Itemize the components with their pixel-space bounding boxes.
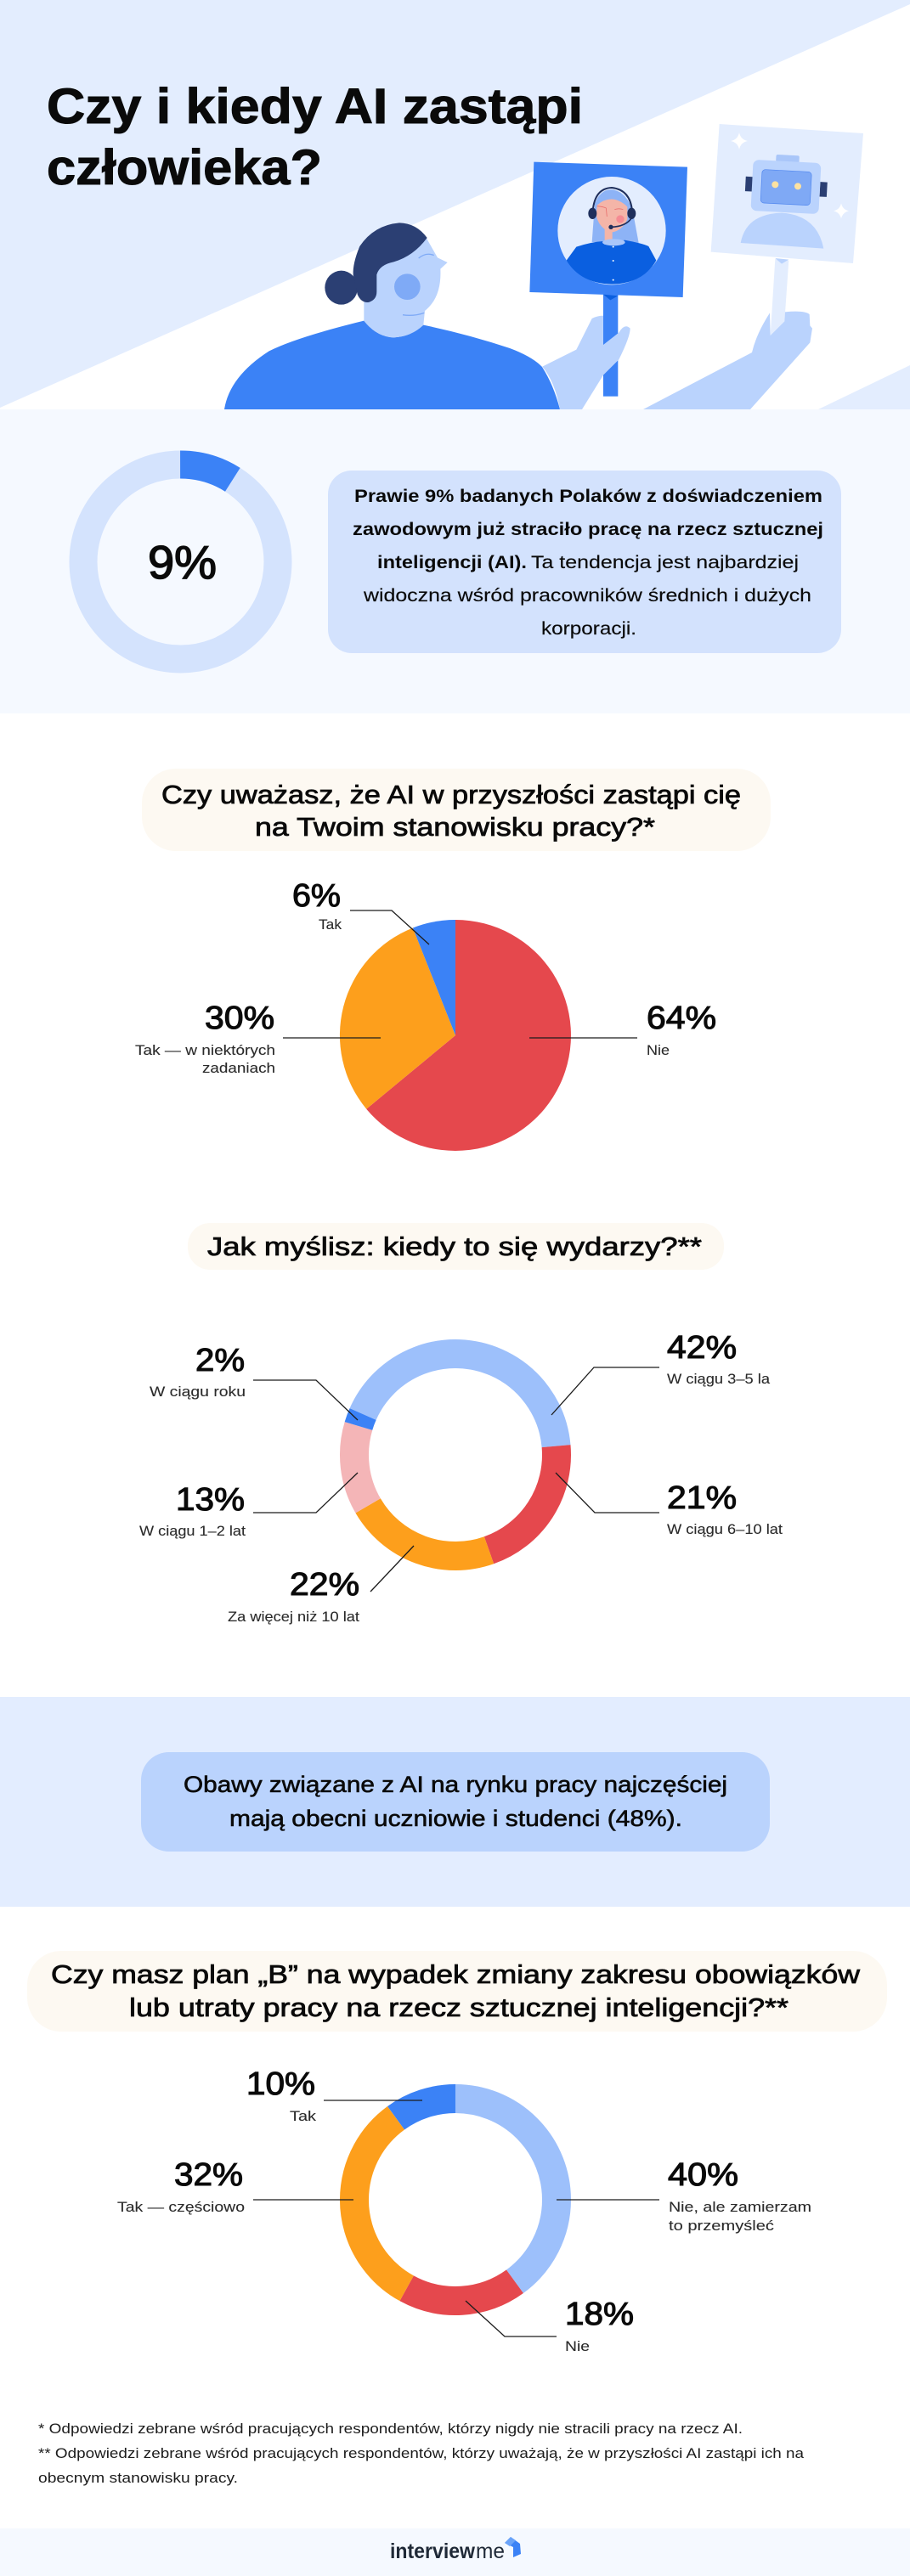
footnotes [38, 2421, 805, 2486]
label: 2%: 2% [195, 1343, 245, 1378]
label: 22%: Za więcej niż 10 lat [228, 1609, 359, 1625]
logo wordmark: me [476, 2539, 505, 2563]
icon: robot sign [711, 124, 863, 335]
label: 30% Tak w niektórych zadaniach: 30% [205, 1001, 274, 1036]
label: 22%: 22% [290, 1567, 359, 1603]
logo icon [505, 2537, 521, 2557]
label: 10%: Tak [290, 2108, 317, 2124]
footnotes: * Odpowiedzi zebrane wśród pracujących respondentów, którzy nigdy nie stracili pracy na rzecz AI. [38, 2421, 743, 2437]
label: 30% Tak w niektórych zadaniach: Tak — w niektórych [135, 1042, 275, 1058]
label: 64% Nie [647, 1001, 716, 1058]
icon: right arm and hand [643, 312, 812, 409]
donut chart: 9% [83, 465, 278, 659]
leader lines [253, 2100, 659, 2336]
panel: question 3 [27, 1951, 887, 2354]
label: 21% [667, 1480, 783, 1537]
label: 40%: to przemyśleć [669, 2218, 775, 2234]
icon: consultant sign [529, 162, 687, 397]
title: człowieka? [47, 140, 322, 195]
heading pill [188, 1223, 724, 1270]
leader lines [253, 1367, 659, 1592]
panel: question 2 [139, 1223, 783, 1625]
label: 6% Tak: 6% [292, 878, 341, 914]
label: 40%: Nie, ale zamierzam [669, 2199, 811, 2215]
label: 18%: Nie [565, 2338, 590, 2354]
callout card [328, 471, 841, 653]
callout card: Obawy związane z AI na rynku pracy najczęściej [184, 1772, 727, 1797]
label: 6% Tak [292, 878, 342, 933]
panel: students callout [0, 1697, 910, 1907]
callout card: zawodowym już straciło pracę na rzecz sztucznej [353, 520, 823, 539]
label: 18% [565, 2297, 634, 2354]
heading pill: Jak myślisz: kiedy to się wydarzy?** [207, 1232, 702, 1261]
label: 21%: 21% [667, 1480, 737, 1516]
label: 42% [667, 1330, 771, 1387]
label: 32%: 32% [174, 2157, 243, 2193]
label: 30% Tak w niektórych zadaniach [135, 1001, 275, 1076]
label: 21%: W ciągu 6–10 lat [667, 1521, 783, 1537]
panel: 9% statistic [0, 409, 910, 713]
panel: question 1 [135, 769, 771, 1151]
callout card: Prawie 9% badanych Polaków z doświadczeniem [354, 487, 822, 506]
label: 6% Tak: Tak [319, 916, 342, 933]
label: 32% [117, 2157, 245, 2215]
label: 40% [668, 2157, 811, 2234]
illustration: person seen from behind [224, 223, 560, 409]
label: 30% Tak w niektórych zadaniach: zadaniach [202, 1060, 275, 1076]
label: 2% [150, 1343, 246, 1400]
section background [0, 1697, 910, 1907]
label: 2%: W ciągu roku [150, 1384, 246, 1400]
callout card: korporacji. [541, 619, 636, 639]
heading pill [142, 769, 771, 851]
callout card: Ta tendencja jest najbardziej [531, 553, 799, 572]
label: 64% Nie: 64% [647, 1001, 716, 1036]
label: 10% [246, 2066, 317, 2124]
footer [0, 2528, 910, 2576]
donut value: 9% [148, 536, 217, 589]
title: Czy i kiedy AI zastąpi [47, 79, 583, 134]
leader lines [283, 910, 637, 1038]
label: 13% [139, 1482, 246, 1539]
heading pill [27, 1951, 887, 2032]
logo wordmark: interview [390, 2539, 476, 2563]
callout card [141, 1752, 770, 1852]
donut chart [314, 2059, 596, 2341]
label: 13%: W ciągu 1–2 lat [139, 1523, 246, 1539]
label: 42%: 42% [667, 1330, 737, 1366]
footnotes: ** Odpowiedzi zebrane wśród pracujących respondentów, którzy uważają, że w przyszłości AI zastąpi ich na [38, 2445, 805, 2461]
panel: hero header [0, 0, 910, 409]
label: 13%: 13% [176, 1482, 245, 1518]
heading pill: na Twoim stanowisku pracy?* [255, 812, 655, 842]
callout card: widoczna wśród pracowników średnich i dużych [363, 586, 811, 606]
label: 32%: Tak — częściowo [117, 2199, 245, 2215]
label: 18%: 18% [565, 2297, 634, 2332]
label: 64% Nie: Nie [647, 1042, 670, 1058]
callout card: inteligencji (AI). [377, 553, 527, 572]
title [47, 79, 583, 195]
footnotes: obecnym stanowisku pracy. [38, 2470, 238, 2486]
hero background with diagonal band [0, 0, 910, 409]
footer background [0, 2528, 910, 2576]
donut chart [317, 1316, 594, 1593]
section background [0, 409, 910, 713]
pie chart [340, 920, 571, 1151]
heading pill: lub utraty pracy na rzecz sztucznej inteligencji?** [129, 1993, 788, 2022]
label: 22% [228, 1567, 359, 1625]
label: 42%: W ciągu 3–5 la [667, 1371, 771, 1387]
label: 40%: 40% [668, 2157, 738, 2193]
icon: left arm and hand [542, 316, 630, 409]
heading pill: Czy masz plan „B” na wypadek zmiany zakresu obowiązków [51, 1959, 861, 1989]
label: 10%: 10% [246, 2066, 315, 2102]
callout card: mają obecni uczniowie i studenci (48%). [229, 1806, 682, 1831]
illustration: signs held in hands [529, 124, 863, 409]
heading pill: Czy uważasz, że AI w przyszłości zastąpi cię [161, 780, 741, 809]
